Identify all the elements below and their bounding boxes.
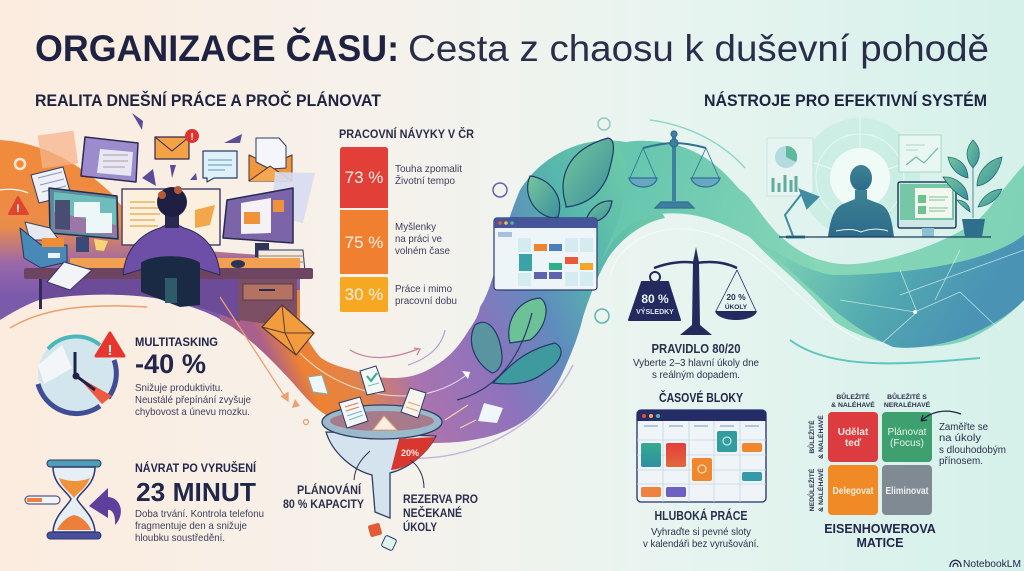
callout text	[939, 421, 1006, 467]
Eisenhower matrix	[806, 391, 936, 550]
bar 75 %: volném čase	[395, 245, 450, 257]
text block: return after interruption	[135, 460, 264, 544]
cell: plan	[882, 412, 932, 462]
bar 30 %: 30 %	[345, 285, 383, 304]
paper on desk	[47, 262, 92, 290]
center monitor	[122, 189, 220, 245]
floating window	[81, 137, 138, 182]
bar 75 %: na práci ve	[395, 233, 442, 245]
bar 73 %: Životní tempo	[395, 174, 455, 187]
text block: multitasking: chybovost a únevu mozku.	[135, 406, 250, 418]
text block: multitasking: -40 %	[135, 349, 206, 379]
calendar: time blocks	[637, 410, 766, 502]
text block: return after interruption: 23 MINUT	[136, 477, 256, 507]
80/20 balance icon: 20 %	[726, 292, 746, 302]
bar 73 %	[340, 147, 462, 208]
warning triangle: !	[108, 342, 112, 359]
hourglass icon	[25, 460, 121, 539]
left monitor	[49, 188, 118, 252]
floating envelope with alert: !	[190, 132, 194, 143]
bar 75 %: Myšlenky	[395, 221, 437, 233]
multitasking broken clock icon	[38, 333, 124, 414]
large leaves on ribbon	[457, 138, 613, 400]
callout text: přínosem.	[939, 455, 983, 467]
text block: rule 80/20: PRAVIDLO 80/20	[652, 342, 741, 356]
text block: return after interruption: hloubku soustředění.	[135, 532, 225, 544]
column labels: BŮLEŽITÉ	[836, 391, 870, 401]
bar 30 %: pracovní dobu	[395, 295, 457, 307]
bar 30 %	[340, 277, 457, 312]
potted plant	[943, 140, 1002, 237]
floating papers	[31, 167, 71, 203]
text block: deep work: v kalendáři bez vyrušování.	[643, 538, 759, 550]
callout text: Zaměřte se	[939, 421, 988, 433]
warning icon	[9, 197, 28, 215]
cell: delegate: Delegovat	[832, 486, 874, 497]
text block: deep work: Vyhraďte si pevné sloty	[651, 526, 752, 538]
calendar on ribbon	[494, 218, 597, 290]
paper going in	[339, 397, 368, 428]
funnel label: reserve	[403, 492, 478, 534]
80/20 balance icon: 80 %	[641, 292, 669, 306]
file organiser	[20, 222, 67, 268]
orange arrow into funnel	[220, 297, 308, 424]
bar 75 %	[340, 210, 450, 274]
title: ORGANIZACE ČASU:	[35, 27, 399, 69]
calm scales icon	[629, 131, 720, 208]
paper going in	[401, 388, 426, 418]
line chart panel	[899, 135, 941, 172]
panel: work habits in Czechia	[339, 126, 474, 312]
80/20 balance icon	[629, 247, 757, 335]
desk	[24, 258, 313, 324]
stress sparks	[132, 113, 242, 186]
cell: eliminate	[882, 465, 932, 515]
funnel label: reserve: ÚKOLY	[403, 519, 437, 534]
background paper	[271, 172, 315, 223]
funnel	[322, 366, 442, 518]
row labels: BŮLEŽITÉ	[806, 420, 816, 454]
mouse	[231, 260, 245, 268]
80/20 balance icon: VÝSLEDKY	[636, 307, 674, 316]
cell: do now: Udělat	[838, 427, 869, 438]
flowing ribbon from chaos to calm	[220, 140, 665, 458]
NotebookLM logo: NotebookLM	[963, 558, 1021, 570]
callout text: s dlouhodobým	[939, 444, 1006, 456]
bar 73 %: 73 %	[345, 168, 383, 187]
silhouette	[828, 165, 894, 237]
text block: rule 80/20: Vyberte 2–3 hlavní úkoly dne	[633, 357, 759, 369]
matrix title: MATICE	[856, 536, 904, 550]
desk line	[779, 236, 991, 238]
warning icon: !	[16, 203, 20, 215]
text block: deep work	[643, 508, 759, 550]
small drifting papers	[308, 375, 503, 423]
envelope on ribbon	[262, 305, 314, 355]
heading: left section: REALITA DNEŠNÍ PRÁCE A PROČ PLÁNOVAT	[35, 91, 381, 110]
text block: return after interruption: Doba trvání. Kontrola telefonu	[135, 508, 264, 520]
column labels	[831, 391, 931, 409]
heading: right section: NÁSTROJE PRO EFEKTIVNÍ SYSTÉM	[704, 91, 987, 110]
flowing wave to calm system	[600, 120, 1024, 363]
sticky note	[94, 239, 108, 251]
funnel: 20%	[401, 448, 419, 458]
bar 73 %: Touha zpomalit	[395, 163, 462, 175]
bar 30 %: Práce i mimo	[395, 283, 452, 295]
funnel label: reserve: NEČEKANÉ	[403, 505, 462, 520]
stacked books	[258, 250, 305, 272]
cell: delegate	[828, 465, 878, 515]
callout text: na úkoly	[939, 432, 982, 444]
right monitor	[223, 188, 293, 257]
monitor	[898, 182, 956, 237]
row labels: & NALÉHAVÉ	[816, 468, 825, 512]
bar 75 %: 75 %	[345, 233, 383, 252]
chat bubble	[203, 151, 237, 182]
text block: multitasking	[135, 335, 251, 418]
text block: rule 80/20	[633, 342, 759, 381]
desk lamp	[785, 190, 818, 237]
funnel label: planning: PLÁNOVÁNÍ	[297, 482, 362, 497]
floating envelope with alert	[155, 129, 199, 159]
funnel label: reserve: REZERVA PRO	[403, 492, 478, 506]
checked paper	[360, 366, 385, 395]
column labels: & NALÉHAVÉ	[831, 400, 875, 409]
text block: rule 80/20: s reálným dopadem.	[652, 369, 740, 381]
cell: plan: Plánovat	[888, 427, 927, 438]
pie chart panel	[767, 138, 813, 196]
text block: deep work: HLUBOKÁ PRÁCE	[654, 508, 748, 523]
row labels	[806, 415, 825, 512]
funnel label: planning: 80 % KAPACITY	[283, 497, 364, 511]
cell: do now: teď	[845, 438, 862, 449]
cell: do now	[828, 412, 878, 462]
text block: multitasking: Snižuje produktivitu.	[135, 382, 223, 394]
paper going in	[373, 416, 397, 430]
cell: eliminate: Eliminovat	[886, 486, 929, 497]
illustration: overwhelmed worker at desk	[9, 113, 315, 324]
callout arrow	[921, 411, 961, 421]
title	[35, 27, 989, 69]
text block: return after interruption: fragmentuje den a snižuje	[135, 520, 247, 532]
calm worker scene	[767, 118, 1002, 238]
title: Cesta z chaosu k duševní pohodě	[408, 28, 989, 69]
heading: time blocks: ČASOVÉ BLOKY	[659, 390, 744, 405]
80/20 balance icon: ÚKOLY	[725, 302, 748, 311]
matrix title	[824, 522, 936, 550]
decorative circles	[493, 118, 610, 323]
text block: multitasking: MULTITASKING	[135, 335, 218, 349]
funnel label: planning	[283, 482, 364, 511]
row labels: NEDŮLEŽITÉ	[806, 468, 816, 511]
column labels: NERALÉHAVÉ	[884, 400, 931, 409]
worker	[123, 186, 220, 307]
callout lines from funnel	[354, 451, 424, 488]
open envelope with paper	[249, 138, 292, 181]
column labels: BŮLEŽITÉ S	[887, 391, 927, 401]
text block: return after interruption: NÁVRAT PO VYRUŠENÍ	[135, 460, 257, 475]
chaotic backdrop swoosh	[0, 131, 300, 328]
cell: plan: (Focus)	[890, 438, 924, 449]
panel: work habits in Czechia: PRACOVNÍ NÁVYKY V ČR	[339, 126, 474, 141]
row labels: & NALÉHAVÉ	[816, 415, 825, 459]
matrix title: EISENHOWEROVA	[824, 522, 936, 536]
funnel output tokens	[368, 523, 397, 551]
text block: multitasking: Neustálé přepínání zvyšuje	[135, 394, 251, 406]
